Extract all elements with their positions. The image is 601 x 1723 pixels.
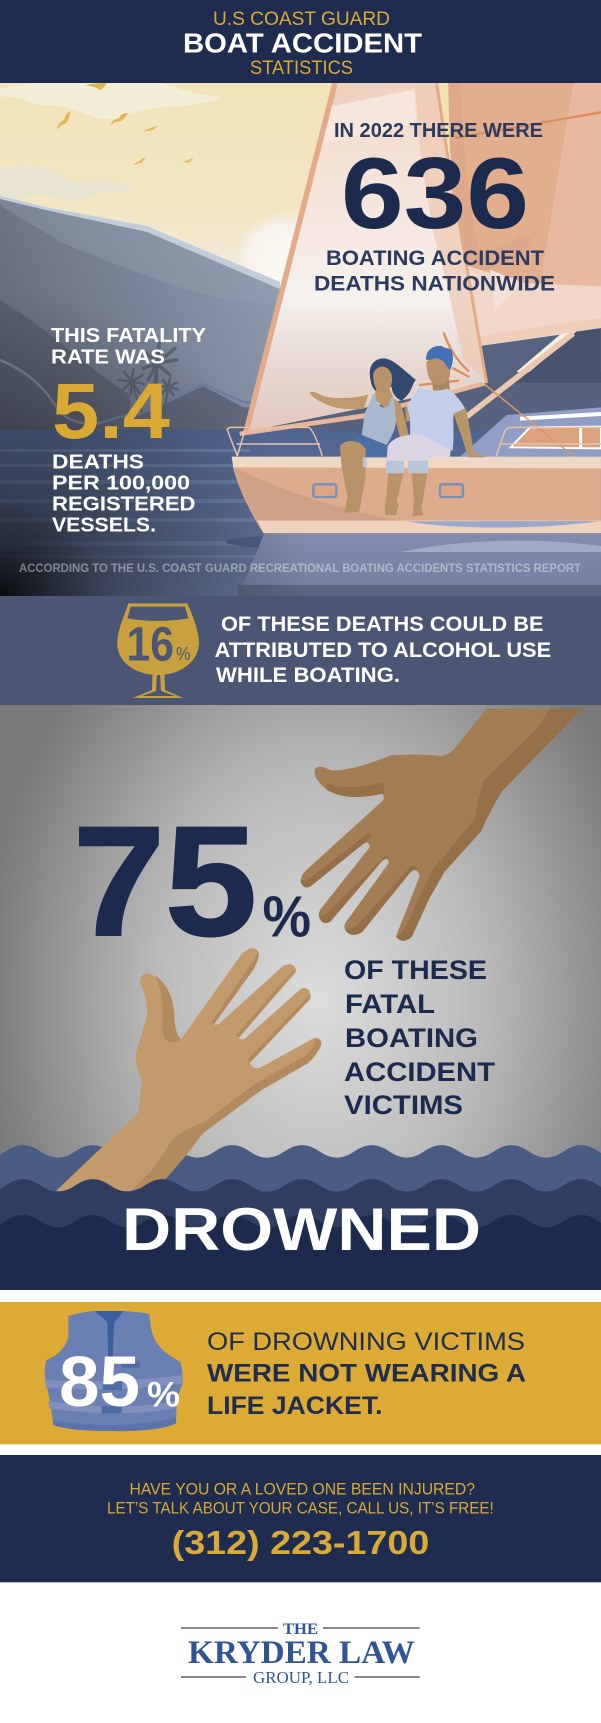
life jacket text xyxy=(207,1329,526,1420)
call to action text: LET’S TALK ABOUT YOUR CASE, CALL US, IT’S FREE! xyxy=(107,1499,494,1517)
life jacket text: LIFE JACKET. xyxy=(207,1393,382,1420)
victims text: OF THESE xyxy=(344,955,487,985)
icon: lower reaching hand xyxy=(56,948,321,1191)
heading: drowned: DROWNED xyxy=(122,1196,481,1263)
hull xyxy=(232,457,601,533)
railings xyxy=(227,427,601,457)
header line: U.S Coast Guard: U.S COAST GUARD xyxy=(213,8,390,30)
palm trees xyxy=(119,343,178,415)
sailboat xyxy=(227,333,601,533)
header band xyxy=(0,0,601,83)
icon: wine glass with 16%: 16 xyxy=(126,619,174,672)
victims text: BOATING xyxy=(345,1023,478,1053)
panel: alcohol statistic xyxy=(0,596,601,706)
number 85 percent xyxy=(59,1343,180,1422)
caption line two: DEATHS NATIONWIDE xyxy=(314,272,555,296)
woman xyxy=(309,358,416,513)
sun glow xyxy=(240,214,298,286)
alcohol text xyxy=(215,613,551,687)
call to action text: HAVE YOU OR A LOVED ONE BEEN INJURED? xyxy=(130,1480,475,1498)
orange rope streaks xyxy=(420,333,468,385)
caption lines xyxy=(52,454,194,532)
panel: sailing scene xyxy=(0,83,601,600)
cabin xyxy=(460,407,601,457)
source note: ACCORDING TO THE U.S. COAST GUARD RECREATIONAL BOATING ACCIDENTS STATISTICS REPORT xyxy=(19,562,582,575)
victims text: VICTIMS xyxy=(344,1090,463,1120)
clouds and birds xyxy=(0,83,223,200)
rear boom stay xyxy=(467,333,573,417)
mountains xyxy=(0,196,280,431)
call to action text xyxy=(107,1480,494,1517)
backdrop behind the boat xyxy=(276,372,601,430)
alcohol text: ATTRIBUTED TO ALCOHOL USE xyxy=(215,639,551,662)
victims text: FATAL xyxy=(345,989,435,1019)
water xyxy=(0,430,601,597)
caption lines: VESSELS. xyxy=(52,515,156,537)
main sail xyxy=(245,83,487,432)
life jacket text: OF DROWNING VICTIMS xyxy=(207,1329,525,1356)
panel: drowned statistic xyxy=(0,705,601,1290)
icon: wine glass with 16% xyxy=(117,603,199,698)
header title: Boat Accident: BOAT ACCIDENT xyxy=(183,28,422,58)
dark vignette xyxy=(0,324,284,596)
victims text: ACCIDENT xyxy=(344,1057,496,1087)
caption lines: DEATHS xyxy=(52,452,144,474)
logo: The Kryder Law Group: THE xyxy=(283,1621,318,1638)
phone number: (312) 223-1700 xyxy=(172,1525,429,1562)
lead-in text second line: RATE WAS xyxy=(51,346,165,368)
alcohol text: WHILE BOATING. xyxy=(216,664,400,687)
boom xyxy=(239,382,485,436)
stat: fatality rate xyxy=(51,325,206,537)
logo: The Kryder Law Group: KRYDER LAW xyxy=(188,1635,415,1671)
man xyxy=(385,346,485,517)
icon: life jacket xyxy=(45,1311,183,1431)
victims text xyxy=(344,955,496,1120)
caption lines: PER 100,000 xyxy=(52,472,190,494)
icon: upper reaching hand xyxy=(301,708,583,941)
number 85 percent: 85 xyxy=(59,1343,140,1422)
logo: The Kryder Law Group xyxy=(181,1621,420,1687)
number 5.4: 5.4 xyxy=(52,366,170,455)
caption line one: BOATING ACCIDENT xyxy=(326,247,544,270)
header line: Statistics: STATISTICS xyxy=(250,58,353,79)
life jacket text: WERE NOT WEARING A xyxy=(207,1361,526,1388)
stat: 636 deaths xyxy=(314,120,555,296)
number 75 percent: 75 xyxy=(73,795,257,969)
number 636: 636 xyxy=(341,138,529,250)
number 85 percent: % xyxy=(147,1376,180,1415)
water waves xyxy=(0,948,601,1290)
number 75 percent: % xyxy=(262,884,311,949)
lead-in text: IN 2022 THERE WERE xyxy=(334,120,543,142)
caption lines: REGISTERED xyxy=(52,494,196,516)
panel: life jacket statistic xyxy=(0,1302,601,1444)
logo: The Kryder Law Group: GROUP, LLC xyxy=(253,1668,349,1687)
panel: call to action xyxy=(0,1455,601,1582)
lead-in text: THIS FATALITY xyxy=(51,325,206,347)
sky xyxy=(0,83,601,383)
right sail xyxy=(437,83,601,383)
alcohol text: OF THESE DEATHS COULD BE xyxy=(221,613,544,636)
icon: wine glass with 16%: % xyxy=(176,644,190,664)
hull reflection xyxy=(226,534,601,597)
